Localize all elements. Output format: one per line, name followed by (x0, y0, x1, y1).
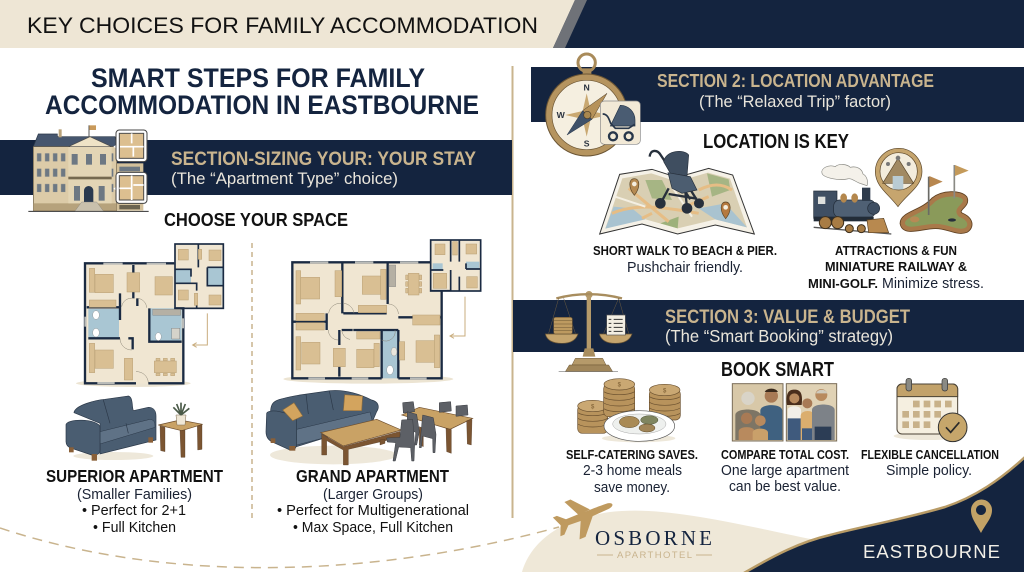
text: compare cost: can be best value. (729, 479, 841, 495)
icon: calendar with check (894, 378, 967, 442)
icon: compass with pram (546, 54, 640, 156)
text: short walk: SHORT WALK TO BEACH & PIER. (593, 243, 777, 258)
text: self-catering: 2-3 home meals (583, 463, 682, 479)
icon: hotel building with floor plan cards (28, 125, 149, 211)
icon: aeroplane (549, 486, 620, 546)
icon: family portrait frames (732, 384, 837, 441)
icon: mini-golf course (903, 165, 969, 231)
icon: balance scales (545, 291, 632, 372)
text: flexible cancellation: FLEXIBLE CANCELLATION (861, 447, 999, 462)
text: attractions: MINIATURE RAILWAY & (825, 259, 967, 274)
text: superior apartment: • Full Kitchen (93, 519, 176, 536)
icon: coins and meal plate: $ (663, 388, 667, 394)
icon: steam train (814, 164, 891, 234)
text: grand apartment: (Larger Groups) (323, 486, 423, 503)
column divider (512, 66, 514, 518)
footer location: Eastbourne (863, 500, 1000, 562)
text: superior apartment: SUPERIOR APARTMENT (46, 466, 223, 486)
icon: coins and meal plate (578, 379, 680, 442)
text: self-catering (566, 447, 698, 496)
logo: Osborne Aparthotel: OSBORNE (595, 526, 712, 550)
text: grand apartment: • Max Space, Full Kitchen (293, 519, 453, 536)
label: Eastbourne: EASTBOURNE (863, 541, 1000, 562)
icon: map with pushchair (600, 151, 754, 234)
furniture: large sofa, coffee table and dining set (266, 390, 473, 465)
subheading: book smart: BOOK SMART (721, 359, 834, 381)
text: superior apartment (46, 466, 223, 536)
dashed flight path (0, 527, 559, 568)
main title (45, 63, 479, 120)
icon: coins and meal plate: $ (618, 383, 622, 389)
text: superior apartment: • Perfect for 2+1 (82, 502, 186, 519)
text: flexible cancellation: Simple policy. (886, 463, 972, 479)
section 1 band (0, 140, 512, 195)
section 2 subheading: (The “Relaxed Trip” factor) (699, 93, 891, 111)
footer cream wave (522, 511, 815, 572)
section 2 heading: SECTION 2: LOCATION ADVANTAGE (657, 71, 934, 91)
text: grand apartment: GRAND APARTMENT (296, 466, 449, 486)
text: superior apartment: (Smaller Families) (77, 486, 192, 503)
text: self-catering: SELF-CATERING SAVES. (566, 447, 698, 462)
section 1 heading: SECTION-SIZING YOUR: YOUR STAY (171, 148, 476, 170)
text: compare cost (721, 447, 849, 495)
text: flexible cancellation (861, 447, 999, 479)
arrow: annex to main plan (193, 313, 207, 347)
footer navy panel (744, 457, 1024, 572)
text: grand apartment: • Perfect for Multigenerational (277, 502, 469, 519)
text: attractions: Minimize stress. (882, 276, 984, 292)
section 3 subheading: (The “Smart Booking” strategy) (665, 326, 893, 346)
section 3 heading: SECTION 3: VALUE & BUDGET (665, 307, 910, 328)
icon: compass with pram: N (584, 83, 590, 93)
text: compare cost: One large apartment (721, 463, 849, 479)
icon: compass with pram: S (584, 139, 590, 149)
text: short walk: Pushchair friendly. (627, 260, 743, 276)
main title: SMART STEPS FOR FAMILY (91, 63, 425, 93)
logo: Osborne Aparthotel: APARTHOTEL (617, 550, 692, 561)
section 3 band (513, 300, 1024, 352)
header title: KEY CHOICES FOR FAMILY ACCOMMODATION (27, 13, 538, 38)
apartment divider (251, 243, 253, 518)
text: short walk (593, 243, 777, 276)
subheading: choose your space: CHOOSE YOUR SPACE (164, 210, 348, 230)
icon: coins and meal plate: $ (591, 404, 595, 410)
arrow: annex to main plan (450, 297, 465, 338)
subheading: location is key: LOCATION IS KEY (703, 131, 850, 153)
main title: ACCOMMODATION IN EASTBOURNE (45, 90, 479, 120)
text: compare cost: COMPARE TOTAL COST. (721, 447, 849, 462)
text: self-catering: save money. (594, 480, 670, 496)
section 2 band (531, 67, 1024, 122)
icon: pushchair (650, 151, 704, 214)
footer gold curve (744, 457, 1024, 572)
text: attractions: ATTRACTIONS & FUN (835, 243, 957, 258)
header banner (0, 0, 1024, 48)
text: attractions: MINI-GOLF. (808, 276, 878, 291)
floor plan: grand apartment (283, 240, 481, 384)
icon: map pin (971, 500, 992, 533)
section 1 subheading: (The “Apartment Type” choice) (171, 170, 398, 188)
icon: compass with pram: W (557, 110, 566, 120)
icon: attraction pin (875, 148, 922, 207)
furniture: sofa and side table (66, 396, 203, 461)
text: grand apartment (277, 466, 469, 536)
logo: Osborne Aparthotel (595, 526, 712, 561)
floor plan: superior apartment (76, 244, 223, 387)
text: attractions (808, 243, 984, 292)
